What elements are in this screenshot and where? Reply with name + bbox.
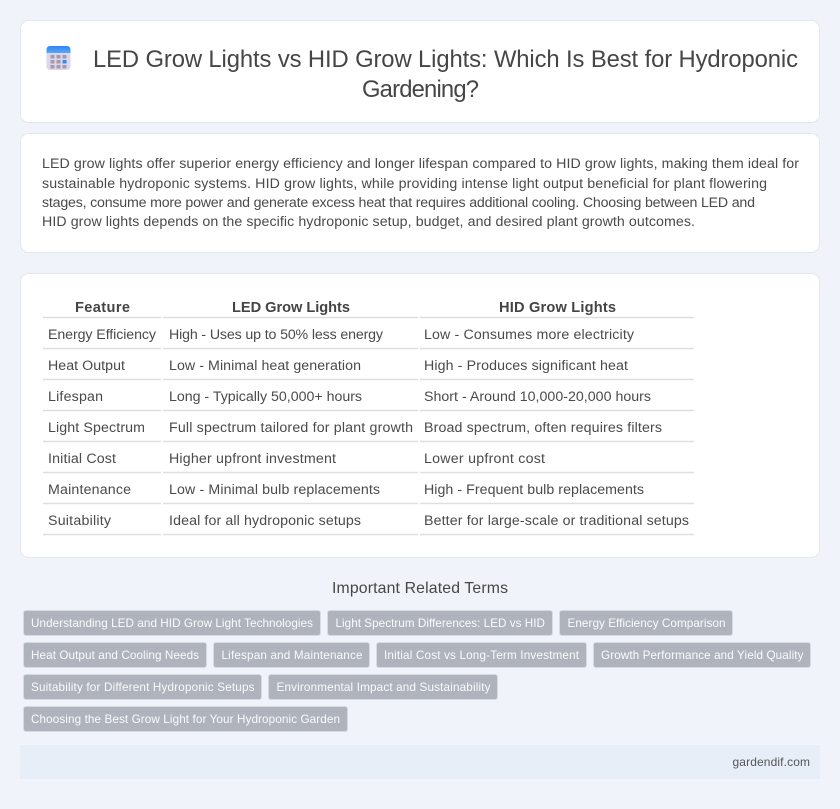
footer source text: gardendif.com xyxy=(732,755,810,769)
tag: technologies: Understanding LED and HID Grow Light Technologies xyxy=(31,617,313,630)
row: lifespan: Lifespan xyxy=(48,389,103,405)
tag: environment xyxy=(268,674,498,700)
panel: header xyxy=(20,20,820,122)
table header row xyxy=(75,300,616,316)
title xyxy=(93,46,798,103)
tag: spectrum: Light Spectrum Differences: LED vs HID xyxy=(336,617,545,630)
title: LED Grow Lights vs HID Grow Lights: Which Is Best for Hydroponic xyxy=(93,46,798,73)
row: light spectrum: Full spectrum tailored for plant growth xyxy=(169,420,413,436)
title: Gardening? xyxy=(362,76,479,103)
row: energy efficiency: High - Uses up to 50% less energy xyxy=(169,327,384,343)
introduction text: sustainable hydroponic systems. HID grow lights, while providing intense light output beneficial for plant flowering xyxy=(42,176,767,192)
panel: comparison table xyxy=(20,274,820,558)
tag: energy xyxy=(560,610,732,636)
tag: suitability: Suitability for Different Hydroponic Setups xyxy=(31,681,255,694)
table header row: HID Grow Lights xyxy=(499,300,616,316)
row: maintenance: Low - Minimal bulb replacements xyxy=(169,482,380,498)
row: maintenance: Maintenance xyxy=(48,482,131,498)
row: suitability: Better for large-scale or traditional setups xyxy=(424,513,689,529)
tag: cost: Initial Cost vs Long-Term Investment xyxy=(384,649,580,662)
tag: environment: Environmental Impact and Sustainability xyxy=(276,681,491,694)
row: heat output: Heat Output xyxy=(48,358,125,374)
row: initial cost xyxy=(48,451,545,467)
tag: growth xyxy=(594,642,810,668)
introduction text: LED grow lights offer superior energy efficiency and longer lifespan compared to HID grow lights, making them ideal for xyxy=(42,156,799,172)
row: energy efficiency: Energy Efficiency xyxy=(48,327,157,343)
row: suitability: Suitability xyxy=(48,513,112,529)
footer xyxy=(20,745,820,779)
row: lifespan: Short - Around 10,000-20,000 hours xyxy=(424,389,651,405)
tag: heat xyxy=(24,642,206,668)
row: lifespan: Long - Typically 50,000+ hours xyxy=(169,389,362,405)
row: maintenance: High - Frequent bulb replacements xyxy=(424,482,644,498)
row: light spectrum: Broad spectrum, often requires filters xyxy=(424,420,662,436)
row: heat output: High - Produces significant heat xyxy=(424,358,628,374)
row: energy efficiency xyxy=(48,327,635,343)
row: light spectrum: Light Spectrum xyxy=(48,420,145,436)
row: initial cost: Initial Cost xyxy=(48,451,116,467)
introduction text xyxy=(42,156,799,230)
table header row: Feature xyxy=(75,300,130,316)
tag: lifespan: Lifespan and Maintenance xyxy=(222,649,362,662)
tag: choosing: Choosing the Best Grow Light for Your Hydroponic Garden xyxy=(31,713,340,726)
row: suitability: Ideal for all hydroponic setups xyxy=(169,513,361,529)
introduction text: HID grow lights depends on the specific hydroponic setup, budget, and desired plant growth outcomes. xyxy=(42,214,695,230)
row: maintenance xyxy=(48,482,644,498)
row: lifespan xyxy=(48,389,651,405)
icon: calendar xyxy=(46,46,70,70)
row: initial cost: Higher upfront investment xyxy=(169,451,336,467)
related term tags xyxy=(24,610,810,732)
tag: growth: Growth Performance and Yield Quality xyxy=(601,649,804,662)
tag: choosing xyxy=(24,706,348,732)
table header row: LED Grow Lights xyxy=(232,300,350,316)
row: initial cost: Lower upfront cost xyxy=(424,451,545,467)
tag: energy: Energy Efficiency Comparison xyxy=(568,617,726,630)
tag: technologies xyxy=(24,610,320,636)
introduction text: stages, consume more power and generate excess heat that requires additional cooling. Choosing between LED and xyxy=(42,195,755,211)
tag: cost xyxy=(376,642,586,668)
row: heat output: Low - Minimal heat generation xyxy=(169,358,361,374)
row: energy efficiency: Low - Consumes more electricity xyxy=(424,327,635,343)
tag: heat: Heat Output and Cooling Needs xyxy=(31,649,199,662)
row: heat output xyxy=(48,358,628,374)
heading: important related terms: Important Related Terms xyxy=(332,580,508,597)
row: light spectrum xyxy=(48,420,662,436)
tag: spectrum xyxy=(328,610,552,636)
tag: suitability xyxy=(24,674,262,700)
row: suitability xyxy=(48,513,689,529)
panel: introduction xyxy=(20,134,820,252)
tag: lifespan xyxy=(214,642,370,668)
